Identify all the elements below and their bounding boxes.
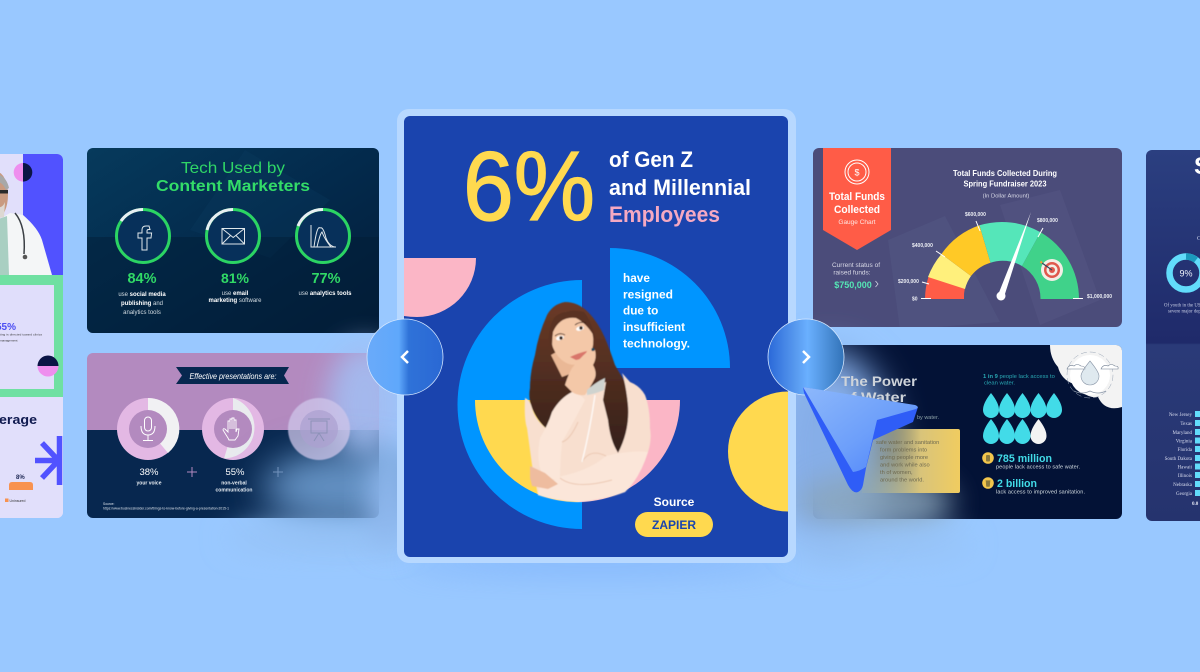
stat: 84% social media: 84% xyxy=(127,271,157,287)
stat: 84% social media: use social media xyxy=(118,292,166,298)
pill: zapier: ZAPIER xyxy=(652,520,697,532)
text: 1 in 9 people xyxy=(983,374,1055,384)
cloud corner shape xyxy=(1050,345,1122,408)
stat: 84% social media: publishing and xyxy=(121,301,163,307)
heading: the power of water xyxy=(841,373,939,421)
donut: non-verbal communication 55%: 55% xyxy=(225,467,245,478)
pictogram: water drops xyxy=(983,393,1062,444)
current status: Current status of xyxy=(832,262,880,269)
shape: blue quarter circle with text xyxy=(610,248,730,368)
panel: effective presentations xyxy=(87,353,379,518)
icon: 3D cursor arrow xyxy=(803,387,918,492)
text box: yellow callout: form problems into xyxy=(880,448,927,454)
text box: yellow callout: and work while also xyxy=(880,462,930,468)
photo: doctor in white coat xyxy=(0,172,52,275)
bar chart: states: Georgia xyxy=(1176,492,1193,497)
stat: 84% social media xyxy=(116,209,170,316)
source note xyxy=(103,502,229,510)
heading: of Gen Z and Millennial Employees: of Gen Z xyxy=(609,147,693,172)
stat: 2 billion xyxy=(982,477,1085,496)
water card heading and callout seen through the glass xyxy=(841,373,960,493)
stat: 81% email: 81% xyxy=(221,270,250,286)
current status: raised funds: xyxy=(833,270,871,276)
heading: the power of water: of Water xyxy=(841,389,907,405)
current status xyxy=(832,262,880,290)
banner: total funds collected: Collected xyxy=(834,204,880,216)
stat: 81% email: use email xyxy=(222,291,249,297)
panel: healthcare card cropped at left edge xyxy=(0,154,63,518)
gauge chart xyxy=(898,212,1112,302)
panel: gauge chart card xyxy=(813,148,1122,330)
shape: blue quarter circle with text: technology. xyxy=(623,336,690,350)
panel: coverage chart: 8% xyxy=(16,475,25,481)
panel: coverage chart xyxy=(0,417,63,518)
donut: your voice 38%: your voice xyxy=(136,480,162,486)
gauge tick labels: $600,000 xyxy=(965,212,986,218)
panel: far-right statistics card xyxy=(1146,150,1200,521)
shape: blue half circle xyxy=(458,280,582,529)
icon: pink and navy circle xyxy=(14,163,32,182)
gauge tick labels: $1,000,000 xyxy=(1087,294,1112,300)
gauge title: Spring Fundraiser 2023 xyxy=(964,180,1047,188)
shape: pink quarter circle xyxy=(578,400,680,502)
icon: water drop in circle xyxy=(1067,352,1118,398)
current status: $750,000 xyxy=(834,280,872,290)
panel: gen z statistic card xyxy=(404,116,788,557)
donut: 9% xyxy=(1170,256,1200,290)
panel: coverage chart: erage xyxy=(0,412,37,427)
banner: total funds collected: $ xyxy=(854,168,860,178)
stat: 84% social media: analytics tools xyxy=(123,310,161,316)
stat: 77% analytics: use analytics tools xyxy=(298,291,352,297)
pill: zapier xyxy=(635,512,713,537)
shape: pink half circle xyxy=(404,258,476,317)
icon: plus xyxy=(187,467,197,477)
panel: green framed statistic: management xyxy=(0,338,18,342)
banner: effective presentations are xyxy=(176,367,289,384)
gauge tick labels: $0 xyxy=(912,296,918,302)
shape: yellow quarter circle xyxy=(475,400,578,502)
text: 1 in 9 people: 1 in 9 people lack access to xyxy=(983,374,1055,380)
icon: target xyxy=(1040,259,1063,281)
shape: yellow half circle xyxy=(728,392,848,512)
text box: yellow callout xyxy=(862,429,960,493)
text box: yellow callout: th of women, xyxy=(880,470,913,476)
text box: yellow callout: safe water and sanitation xyxy=(876,440,939,446)
donut: non-verbal communication 55% xyxy=(202,398,264,494)
panel: green framed statistic xyxy=(0,275,63,397)
donut: 9%: 9% xyxy=(1179,268,1193,278)
heading: Content Marketers xyxy=(156,178,310,195)
bar chart: states: Maryland xyxy=(1173,431,1192,436)
banner: total funds collected xyxy=(823,148,891,250)
stat: 2 billion: lack access to improved sanitation. xyxy=(996,490,1085,496)
panel: green framed statistic: ting is directed toward clinics xyxy=(0,332,42,336)
gauge title: (In Dollar Amount) xyxy=(983,194,1029,200)
bar chart: states: South Dakota xyxy=(1165,457,1193,462)
donut: your voice 38% xyxy=(117,398,179,486)
stat: 77% analytics: 77% xyxy=(311,271,341,287)
banner: total funds collected: Gauge Chart xyxy=(838,219,876,226)
gauge title: Total Funds Collected During xyxy=(953,169,1057,178)
photo: thoughtful woman xyxy=(525,302,651,502)
bar chart: states: Virginia xyxy=(1176,440,1193,444)
text box: yellow callout: giving people more xyxy=(880,455,928,461)
heading: of Gen Z and Millennial Employees: Employees xyxy=(609,202,720,227)
gauge tick labels: $400,000 xyxy=(912,243,933,249)
caption: youth statistic: Of youth in the US xyxy=(1164,304,1200,308)
source note: Source: xyxy=(103,502,114,506)
glass blur: left of the central card xyxy=(227,343,427,552)
panel: tech used by content marketers xyxy=(87,148,379,333)
shape: blue quarter circle with text: due to xyxy=(623,304,658,318)
heading: of Gen Z and Millennial Employees: and Millennial xyxy=(609,175,751,200)
stat: 81% email xyxy=(206,209,262,304)
donut: non-verbal communication 55%: communication xyxy=(216,488,252,494)
heading: the power of water: by water. xyxy=(917,415,939,421)
stat: 81% email: marketing software xyxy=(208,298,262,304)
gauge tick labels xyxy=(898,212,1112,302)
central card soft glow xyxy=(406,552,786,576)
panel: coverage chart: Uninsured xyxy=(10,499,26,503)
bar chart: states: 0.0 xyxy=(1192,502,1199,507)
bar chart: states xyxy=(1165,411,1200,507)
gauge tick labels: $800,000 xyxy=(1037,218,1058,224)
icon: plus xyxy=(273,467,283,477)
bar chart: states: Illinois xyxy=(1178,474,1192,479)
gauge title xyxy=(953,169,1057,200)
source label: Source xyxy=(654,495,695,509)
glass blur: right of the central card xyxy=(770,350,970,559)
stat: 2 billion: 2 billion xyxy=(997,478,1037,490)
bar chart: states: Texas xyxy=(1180,422,1192,427)
gauge tick labels: $200,000 xyxy=(898,279,919,285)
bar chart: states: Nebraska xyxy=(1173,483,1193,488)
bar chart: states: Florida xyxy=(1178,448,1193,453)
banner: effective presentations are: Effective presentations are: xyxy=(190,371,277,381)
bar chart: states: New Jersey xyxy=(1169,413,1192,418)
heading: Tech Used by xyxy=(181,160,285,177)
stat: 785 million xyxy=(982,452,1080,470)
banner: total funds collected: Total Funds xyxy=(829,191,885,203)
text box: yellow callout: around the world. xyxy=(880,478,924,484)
shape: blue quarter circle with text: insufficient xyxy=(623,320,685,334)
stat: 77% analytics xyxy=(296,209,352,297)
stat: 785 million: 785 million xyxy=(997,453,1052,465)
stat: 6%: 6% xyxy=(463,131,595,241)
caption: youth statistic xyxy=(1164,304,1200,314)
button: next arrow xyxy=(768,319,844,395)
heading: the power of water: The Power xyxy=(841,373,918,389)
source note: https://www.businessinsider.com/things-to-know-before-giving-a-presentation-2015-1 xyxy=(103,506,229,510)
donut: your voice 38%: 38% xyxy=(139,467,159,478)
shape: blue quarter circle with text: resigned xyxy=(623,288,673,302)
panel: central featured card frame xyxy=(397,109,796,563)
heading: of Gen Z and Millennial Employees xyxy=(609,147,751,227)
heading xyxy=(156,162,310,191)
button: previous arrow xyxy=(367,319,443,395)
text: 1 in 9 people: clean water. xyxy=(984,380,1015,386)
stat: 785 million: people lack access to safe water. xyxy=(996,464,1080,470)
panel: the power of water card xyxy=(813,345,1122,519)
bar chart: states: Hawaii xyxy=(1178,466,1193,470)
gauge needle xyxy=(996,212,1031,300)
shape: blue quarter circle with text: have xyxy=(623,271,650,285)
donut: non-verbal communication 55%: non-verbal xyxy=(221,480,247,486)
